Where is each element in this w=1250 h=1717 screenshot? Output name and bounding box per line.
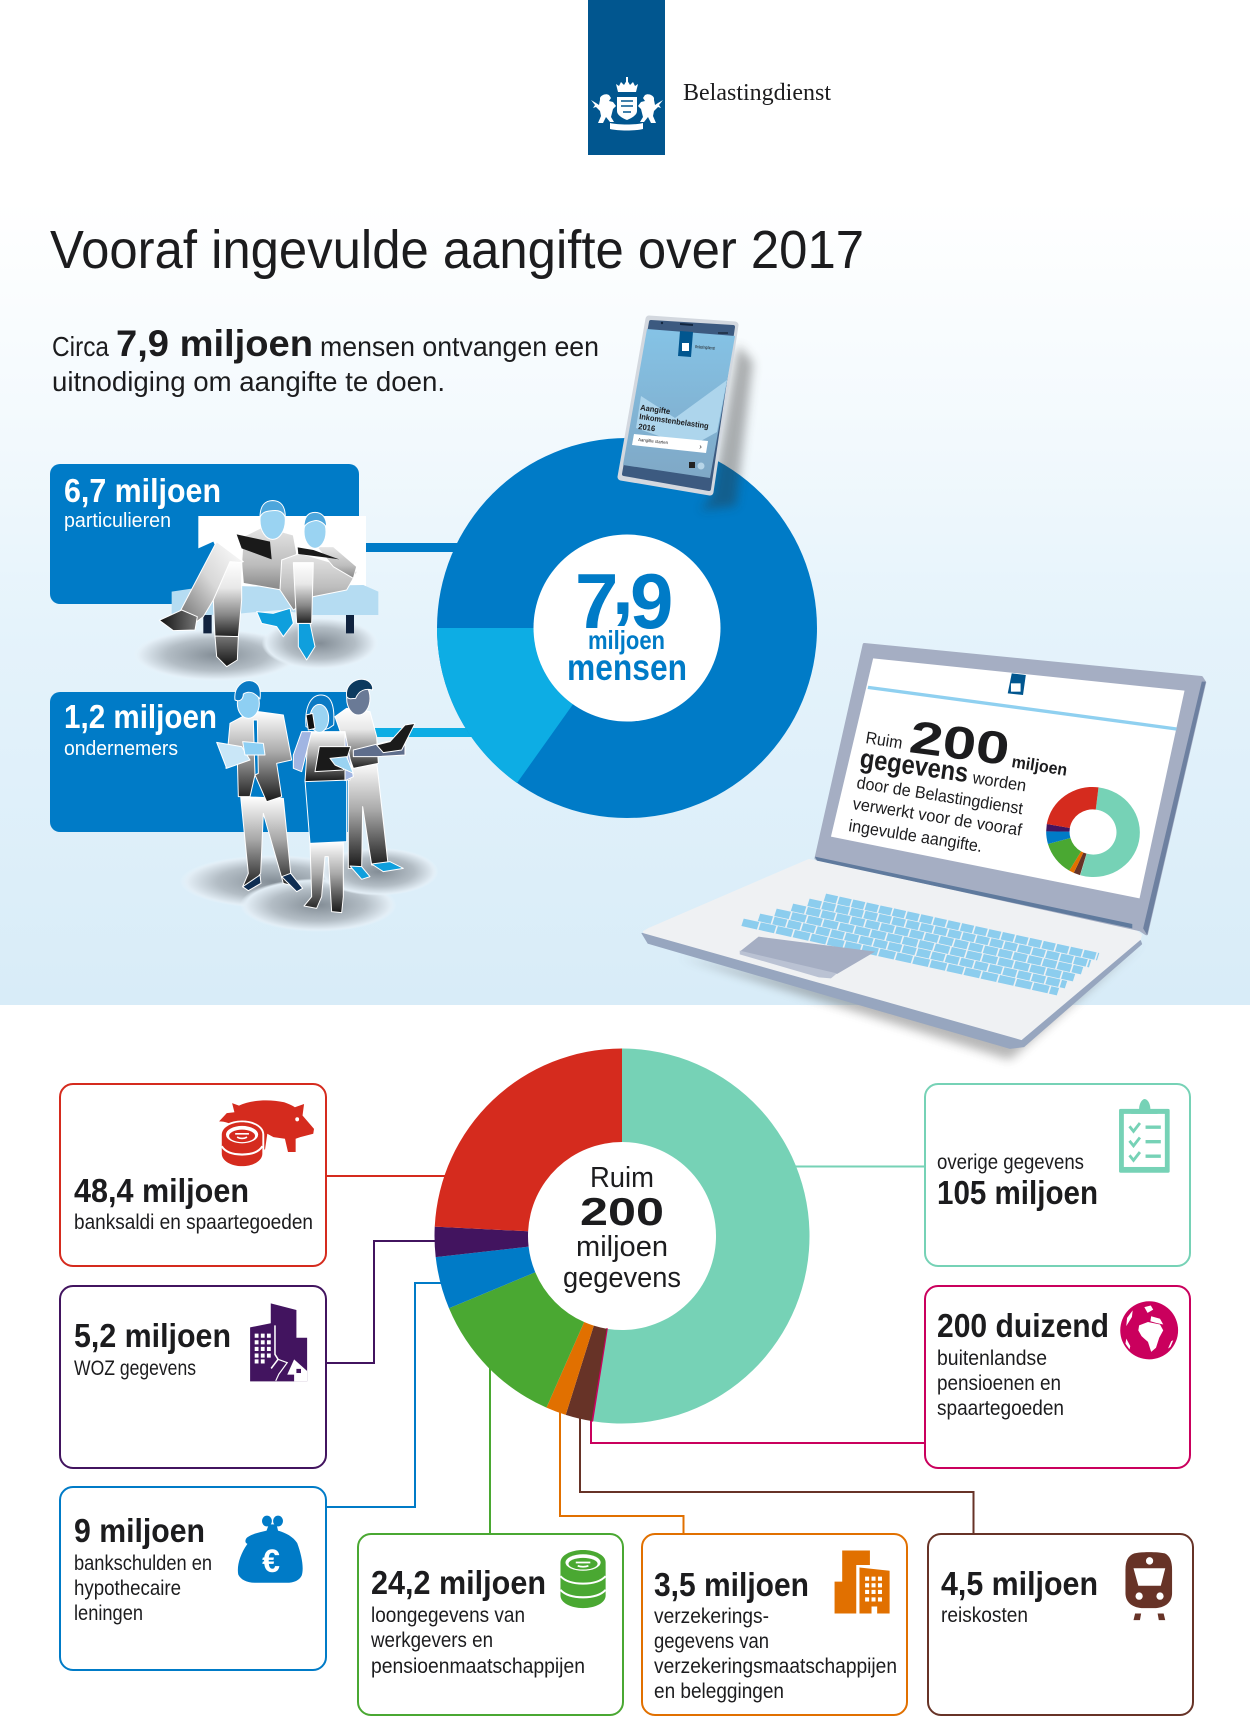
laptop screen text: worden [970, 768, 1028, 795]
panel: verzekeringsgegevens: verzekerings- [654, 1605, 769, 1628]
laptop screen text: Ruim [864, 728, 904, 753]
phone illustration: Belastingdienst [695, 344, 716, 351]
donut centre label: 9 [630, 557, 673, 645]
donut chart: 7,9 miljoen mensen [437, 438, 817, 818]
panel: bankschulden: leningen [74, 1602, 143, 1625]
phone illustration: Aangifte [640, 403, 671, 416]
panel: verzekeringsgegevens [642, 1534, 907, 1715]
panel: ondernemers: ondernemers [64, 738, 178, 760]
intro text: Circa [52, 331, 109, 362]
donut centre label: miljoen [576, 1231, 668, 1263]
panel: WOZ gegevens: 5,2 miljoen [74, 1317, 231, 1354]
donut centre label: 7 [575, 557, 618, 645]
panel: banksaldi: banksaldi en spaartegoeden [74, 1211, 313, 1234]
donut centre label: miljoen [588, 625, 665, 655]
intro text [52, 323, 599, 397]
panel: verzekeringsgegevens: en beleggingen [654, 1680, 784, 1703]
slice: overige gegevens [593, 1048, 810, 1424]
donut chart: 200 miljoen gegevens [435, 1048, 810, 1424]
icon: globe [1120, 1301, 1178, 1359]
laptop screen text: ingevulde aangifte. [847, 816, 984, 856]
panel: ondernemers: 1,2 miljoen [64, 698, 217, 735]
panel: buitenlandse pensioenen: 200 duizend [937, 1307, 1109, 1344]
woman with tablet [304, 842, 343, 913]
slice: WOZ gegevens [435, 1227, 529, 1257]
phone illustration: › [699, 442, 703, 451]
panel: overige gegevens: overige gegevens [937, 1151, 1084, 1174]
slice: reiskosten [566, 1326, 607, 1421]
panel: ondernemers [50, 692, 359, 832]
phone illustration: 2016 [638, 422, 656, 433]
panel: particulieren: 6,7 miljoen [64, 472, 221, 509]
touchpad [740, 937, 875, 978]
logo wordmark: Belastingdienst [683, 80, 831, 106]
icon: piggy bank with coins [219, 1100, 314, 1168]
panel: banksaldi: 48,4 miljoen [74, 1172, 249, 1209]
slice: verzekeringsgegevens [546, 1322, 594, 1415]
euro glyph: € [262, 1543, 280, 1579]
donut centre label: 200 [580, 1191, 664, 1234]
laptop screen text: miljoen [1010, 752, 1069, 780]
phone illustration: Inkomstenbelasting [639, 412, 709, 431]
icon: stacked coins [560, 1550, 606, 1608]
keyboard [743, 897, 1098, 992]
laptop shadow [680, 942, 1142, 1060]
panel: WOZ gegevens [60, 1286, 326, 1468]
panel: overige gegevens [925, 1084, 1190, 1266]
illustration: three business people [180, 679, 438, 932]
title: Vooraf ingevulde aangifte over 2017 [50, 220, 864, 280]
panel: buitenlandse pensioenen: pensioenen en [937, 1372, 1061, 1395]
panel: loongegevens: pensioenmaatschappijen [371, 1655, 585, 1678]
man with laptop [348, 762, 388, 868]
panel: bankschulden [60, 1487, 326, 1670]
panel: buitenlandse pensioenen: spaartegoeden [937, 1397, 1064, 1420]
panel: verzekeringsgegevens: 3,5 miljoen [654, 1566, 809, 1603]
donut centre label: , [612, 543, 634, 631]
panel: loongegevens: loongegevens van [371, 1604, 525, 1627]
laptop base [644, 860, 1141, 1041]
illustration: seated couple with tablets [133, 501, 378, 681]
slice: buitenlandse pensioenen [592, 1329, 607, 1421]
intro text: mensen ontvangen een [320, 331, 599, 362]
donut centre label [563, 1162, 681, 1294]
panel: WOZ gegevens: WOZ gegevens [74, 1357, 196, 1380]
logo: Rijksoverheid bar with coat of arms [588, 0, 665, 155]
panel: buitenlandse pensioenen: buitenlandse [937, 1347, 1047, 1370]
panel: reiskosten: reiskosten [941, 1604, 1028, 1627]
connector lines people to donut [360, 543, 475, 737]
icon: train [1125, 1552, 1172, 1620]
panel: loongegevens: werkgevers en [370, 1629, 493, 1652]
laptop illustration [642, 644, 1206, 1060]
intro text: uitnodiging om aangifte te doen. [52, 366, 445, 397]
phone illustration: Aangifte starten [638, 437, 669, 445]
panel: particulieren: particulieren [64, 510, 171, 532]
slice: bankschulden [436, 1247, 535, 1308]
panel: verzekeringsgegevens: verzekeringsmaatschappijen [654, 1655, 897, 1678]
panel: verzekeringsgegevens: gegevens van [654, 1630, 769, 1653]
laptop screen text: gegevens [858, 743, 970, 788]
slice: loongegevens [449, 1272, 584, 1408]
man with document [241, 797, 302, 890]
background gradient panel [0, 0, 1250, 1005]
slice: banksaldi [435, 1048, 622, 1231]
icon: buildings and house [250, 1303, 307, 1381]
panel: reiskosten: 4,5 miljoen [941, 1565, 1098, 1602]
panel: loongegevens: 24,2 miljoen [371, 1564, 546, 1601]
laptop screen text: verwerkt voor de vooraf [851, 794, 1023, 840]
panel: overige gegevens: 105 miljoen [937, 1174, 1098, 1211]
laptop screen text: 200 [907, 710, 1013, 775]
icon: clipboard checklist [1119, 1099, 1170, 1173]
panel: bankschulden: hypothecaire [74, 1577, 181, 1600]
laptop screen text [847, 710, 1069, 856]
panel: bankschulden: 9 miljoen [74, 1512, 205, 1549]
panel: bankschulden: bankschulden en [74, 1552, 212, 1575]
panel: particulieren [50, 464, 359, 604]
panel: reiskosten [928, 1534, 1193, 1715]
panel: buitenlandse pensioenen [925, 1286, 1190, 1468]
laptop screen text: door de Belastingdienst [855, 773, 1025, 818]
laptop screen [831, 658, 1185, 898]
laptop lid [816, 644, 1205, 934]
icon: office buildings [835, 1550, 890, 1613]
donut centre label: gegevens [563, 1262, 681, 1294]
phone illustration [621, 319, 753, 510]
panel: loongegevens [358, 1534, 623, 1715]
intro text: 7,9 miljoen [116, 323, 313, 364]
icon: purse with euro [238, 1516, 303, 1583]
mini donut on laptop screen [1041, 782, 1145, 882]
donut centre label: mensen [567, 647, 687, 688]
panel: banksaldi [60, 1084, 326, 1266]
donut centre label [567, 543, 687, 688]
connector lines for data boxes [326, 1166, 974, 1534]
donut centre label: Ruim [590, 1162, 654, 1194]
